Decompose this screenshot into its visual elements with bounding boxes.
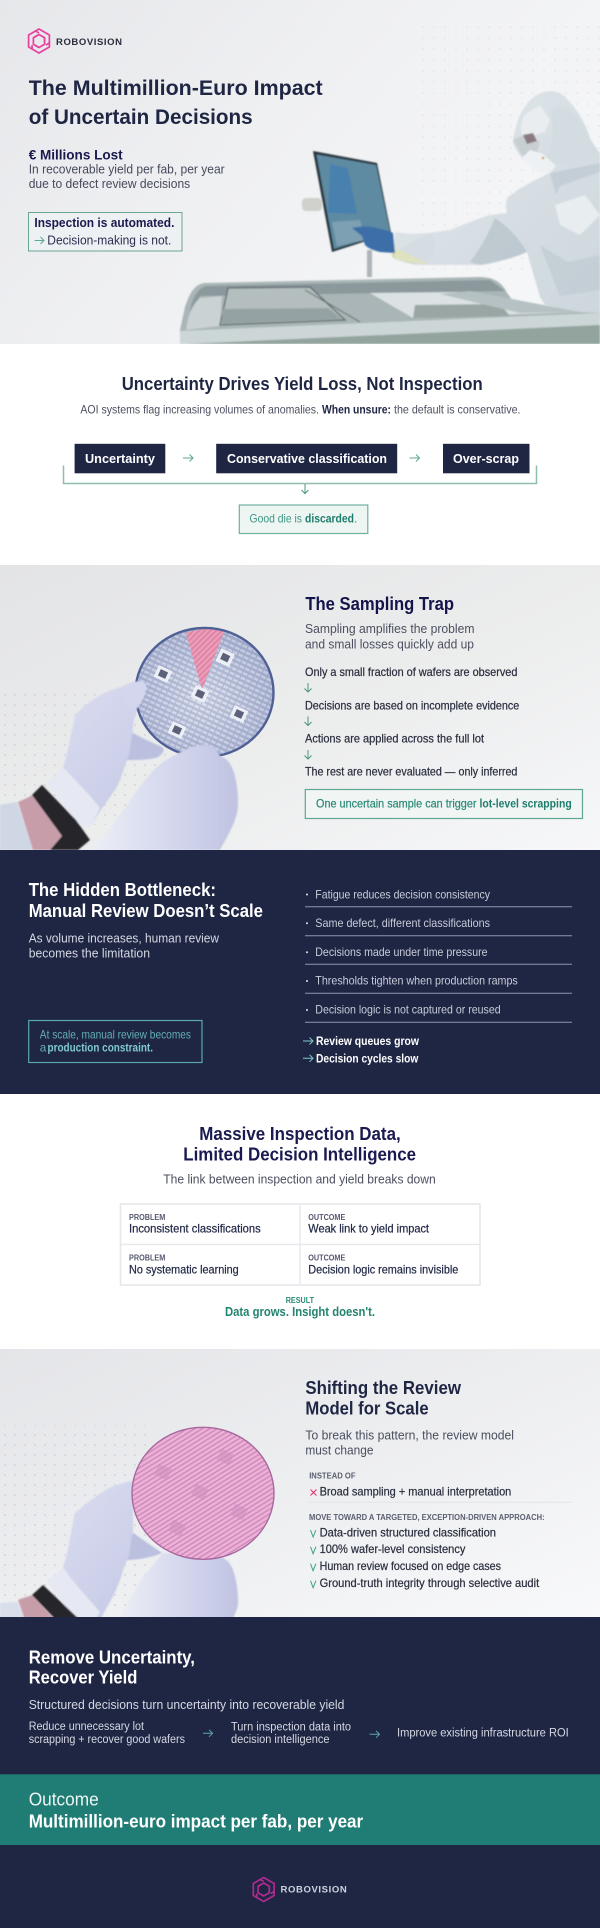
table: problems and outcomes [120,1204,480,1285]
list: review limitations: Thresholds tighten when production ramps [315,975,518,988]
step: conservative classification: Conservative classification [227,451,387,466]
table: problems and outcomes: Weak link to yield impact [308,1222,430,1236]
callout: production constraint: production constraint. [48,1042,153,1055]
callout: inspection automated [28,212,182,251]
stat: millions lost [29,146,225,191]
subheading: and small losses quickly add up [305,636,474,651]
list: review limitations: Fatigue reduces decision consistency [315,888,490,901]
callout: lot-level scrapping [305,790,582,818]
heading: Recover Yield [29,1668,137,1688]
callout: lot-level scrapping: lot-level scrapping [480,797,572,811]
callout: production constraint [29,1020,202,1062]
callout: production constraint: a [40,1042,47,1055]
subheading [80,404,521,417]
flow: benefits: Improve existing infrastructure ROI [397,1728,569,1740]
panel: hero [0,0,600,344]
wafer with sampled sector [136,628,274,757]
move toward [309,1513,545,1590]
subheading: becomes the limitation [29,945,150,960]
band: outcome [0,1774,600,1845]
heading: Limited Decision Intelligence [183,1145,416,1165]
heading [305,1378,462,1418]
instead of: INSTEAD OF [309,1472,356,1481]
consequences [303,1034,420,1065]
step: conservative classification [216,444,397,473]
list: sampling chain: The rest are never evaluated — only inferred [305,765,517,779]
arrow down [302,484,308,494]
list: sampling chain: Decisions are based on incomplete evidence [305,698,520,712]
flow: uncertainty to over-scrap [64,444,536,534]
title: of Uncertain Decisions [29,105,253,129]
title [29,76,323,129]
logo: Robovision: ROBOVISION [56,37,122,48]
heading: Shifting the Review [305,1378,462,1398]
heading: Model for Scale [305,1398,429,1418]
move toward: 100% wafer-level consistency [320,1542,465,1556]
flow: benefits [29,1721,569,1746]
table: problems and outcomes: PROBLEM [129,1213,165,1222]
band: outcome: Outcome [29,1789,99,1809]
heading: Uncertainty Drives Yield Loss, Not Inspection [122,373,483,394]
instead of: Broad sampling + manual interpretation [320,1485,511,1499]
result: Data grows. Insight doesn't. [225,1305,375,1319]
move toward: Data-driven structured classification [320,1525,496,1539]
subheading [305,1428,514,1457]
result [225,1296,375,1319]
panel: massive inspection data [0,1094,600,1349]
subheading [29,931,219,960]
callout: inspection automated: Decision-making is not. [47,234,171,248]
logo: Robovision [23,29,122,56]
band: outcome: Multimillion-euro impact per fab, per year [29,1811,363,1831]
panel: the hidden bottleneck [0,850,600,1094]
heading: Manual Review Doesn’t Scale [29,901,263,921]
heading: The Hidden Bottleneck: [29,880,216,900]
subheading [305,621,475,651]
pink wafer [132,1427,274,1559]
callout: good die discarded: Good die is [250,512,302,526]
callout: good die discarded: discarded [305,512,354,526]
table: problems and outcomes: OUTCOME [308,1253,345,1262]
table: problems and outcomes: PROBLEM [129,1253,165,1262]
subheading: Sampling amplifies the problem [305,621,475,636]
move toward: MOVE TOWARD A TARGETED, EXCEPTION-DRIVEN APPROACH: [309,1513,545,1522]
logo: footer [248,1878,347,1905]
stat: millions lost: In recoverable yield per fab, per year [29,162,225,176]
table: problems and outcomes: No systematic learning [129,1262,239,1276]
arrow [410,454,420,462]
panel: shifting the review model [0,1349,600,1620]
list: review limitations: Decision logic is not captured or reused [315,1004,501,1017]
flow: benefits: decision intelligence [231,1734,330,1746]
list: sampling chain: Actions are applied across the full lot [305,732,485,746]
step: uncertainty [75,444,165,473]
step: uncertainty: Uncertainty [85,451,156,466]
flow: benefits: Reduce unnecessary lot [29,1721,145,1733]
subheading: AOI systems flag increasing volumes of anomalies. [80,404,319,417]
title: The Multimillion-Euro Impact [29,76,323,100]
heading: Remove Uncertainty, [29,1647,195,1667]
subheading: the default is conservative. [394,404,520,417]
list: review limitations [305,888,572,1022]
panel: the sampling trap [0,565,600,850]
table: problems and outcomes: Decision logic remains invisible [308,1262,459,1276]
table: problems and outcomes: OUTCOME [308,1213,345,1222]
image: cleanroom worker at touchscreen [180,91,600,344]
image: gloved hands holding pink wafer [0,1427,274,1620]
logo: footer: ROBOVISION [280,1885,347,1896]
instead of [309,1472,511,1499]
subheading: As volume increases, human review [29,931,219,946]
heading: Massive Inspection Data, [199,1124,401,1144]
heading [29,880,263,921]
heading [183,1124,416,1165]
step: over-scrap: Over-scrap [453,451,519,466]
stat: millions lost: due to defect review decisions [29,177,190,191]
subheading: must change [305,1442,374,1457]
list: review limitations: Same defect, different classifications [315,917,490,930]
table: problems and outcomes: Inconsistent classifications [129,1222,261,1236]
move toward: Human review focused on edge cases [320,1559,501,1573]
callout: production constraint: At scale, manual review becomes [40,1029,191,1042]
callout: inspection automated: Inspection is automated. [34,216,174,230]
subheading: When unsure: [322,404,391,417]
arrow [183,454,193,462]
flow: benefits: scrapping + recover good wafers [29,1734,185,1746]
panel: uncertainty drives yield loss [0,344,600,565]
panel: remove uncertainty [0,1617,600,1928]
move toward: Ground-truth integrity through selective audit [320,1576,540,1590]
subheading: To break this pattern, the review model [305,1428,514,1443]
consequences: Decision cycles slow [316,1051,419,1065]
callout: good die discarded: . [354,512,357,526]
heading: The Sampling Trap [305,594,454,614]
subheading: The link between inspection and yield breaks down [163,1171,436,1186]
callout: lot-level scrapping: One uncertain sample can trigger [316,797,477,811]
list: review limitations: Decisions made under time pressure [315,946,488,959]
list: sampling chain: Only a small fraction of wafers are observed [305,665,517,679]
list: sampling chain [304,665,520,779]
consequences: Review queues grow [316,1034,420,1048]
flow: benefits: Turn inspection data into [231,1721,351,1733]
result: RESULT [286,1296,314,1305]
image: gloved hands holding wafer [0,628,274,850]
subheading: Structured decisions turn uncertainty into recoverable yield [29,1697,344,1712]
stat: millions lost: € Millions Lost [29,146,123,162]
step: over-scrap [443,444,530,473]
callout: good die discarded [239,505,368,534]
heading [29,1647,195,1688]
